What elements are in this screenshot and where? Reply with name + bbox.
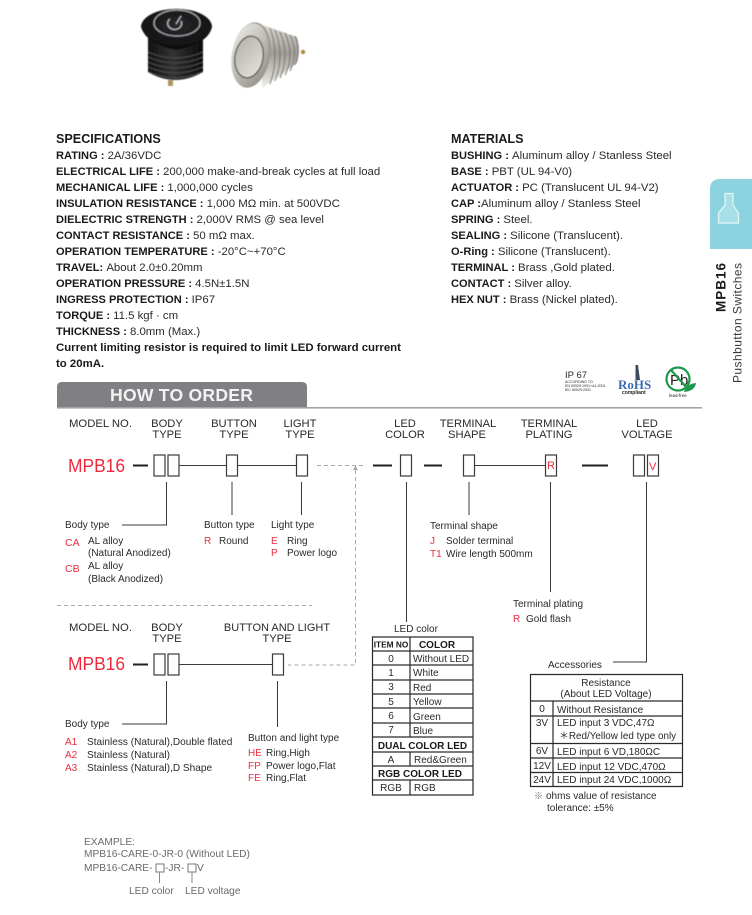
legend: body type alternate: A3: [65, 763, 78, 774]
leader lines: [122, 482, 646, 662]
photo: black power-logo switch: [141, 9, 212, 86]
text block: materials list: O-Ring : Silicone (Translucent).: [451, 246, 611, 258]
example block: LED color: [129, 886, 174, 897]
text block: materials list: ACTUATOR : PC (Translucent UL 94-V2): [451, 182, 659, 194]
column headings: LED: [394, 418, 416, 430]
footnote: ohms value of resistance: [546, 791, 657, 802]
table text: [374, 640, 469, 794]
legend: terminal shape: J: [430, 536, 435, 547]
table text: 6V: [536, 746, 548, 757]
table text: Green: [413, 712, 441, 723]
table grid: [530, 674, 682, 786]
text block: specification list: THICKNESS : 8.0mm (Max.): [56, 326, 200, 338]
text block: specification list: DIELECTRIC STRENGTH : 2,000V RMS @ sea level: [56, 214, 324, 226]
legend: button and light type: Power logo,Flat: [266, 761, 336, 772]
heading: materials: MATERIALS: [451, 132, 524, 146]
table text: Red: [413, 683, 431, 694]
text block: specification list: OPERATION TEMPERATURE : -20°C~+70°C: [56, 246, 286, 258]
table caption: LED color: [394, 624, 439, 635]
legend: terminal shape: Terminal shape: [430, 521, 498, 532]
column headings: COLOR: [385, 429, 425, 441]
heading: how to order: [57, 382, 702, 409]
legend: body type: [65, 520, 171, 585]
table text: White: [413, 668, 439, 679]
column headings: PLATING: [525, 429, 573, 441]
text block: specification list: INGRESS PROTECTION : IP67: [56, 294, 215, 306]
footnote: [534, 791, 657, 814]
example block: MPB16-CARE-0-JR-0 (Without LED): [84, 849, 250, 860]
legend: body type: CB: [65, 563, 80, 575]
table text: [533, 678, 676, 786]
legend: light type: Ring: [287, 536, 308, 547]
logo: IP 67: IEC 60529:2001: [565, 388, 591, 392]
column headings: TYPE: [152, 633, 182, 645]
table text: Blue: [413, 726, 433, 737]
text block: specification list: Current limiting resistor is required to limit LED forward current: [56, 342, 401, 354]
legend: button and light type: Ring,High: [266, 748, 310, 759]
photo: stainless steel switch: [227, 19, 305, 91]
legend: body type: AL alloy: [88, 561, 123, 572]
text block: specification list: RATING : 2A/36VDC: [56, 150, 161, 162]
column headings: TYPE: [262, 633, 292, 645]
legend: body type: AL alloy: [88, 536, 123, 547]
logo: RoHS compliant: [618, 365, 651, 396]
table text: ＊Red/Yellow led type only: [559, 731, 676, 742]
legend: body type alternate: A1: [65, 737, 78, 748]
legend: button and light type: FE: [248, 773, 261, 784]
column headings: MODEL NO.: [69, 622, 132, 634]
logo: IP 67: [565, 370, 605, 392]
text block: materials list: SPRING : Steel.: [451, 214, 533, 226]
column headings: TYPE: [152, 429, 182, 441]
panel: specifications: [56, 132, 401, 370]
text block: specification list: OPERATION PRESSURE : 4.5N±1.5N: [56, 278, 249, 290]
column headings: VOLTAGE: [621, 429, 673, 441]
table text: COLOR: [419, 640, 456, 651]
table text: 0: [539, 704, 545, 715]
legend: body type alternate: A2: [65, 750, 78, 761]
legend: body type: (Natural Anodized): [88, 548, 171, 559]
legend: button type: Round: [219, 536, 248, 547]
logo: lead-free: lead-free: [669, 393, 687, 398]
table text: LED input 24 VDC,1000Ω: [557, 775, 672, 786]
legend: button and light type: HE: [248, 748, 262, 759]
text block: specification list: [56, 150, 401, 370]
table text: Red&Green: [414, 755, 467, 766]
column headings: [69, 418, 673, 441]
table text: Without LED: [413, 654, 469, 665]
model code: MPB16: [68, 455, 125, 476]
example block: MPB16-CARE-: [84, 863, 152, 874]
column headings: BODY: [151, 418, 183, 430]
order code diagram: alternate model: [68, 622, 330, 727]
legend: terminal plating: R: [513, 614, 520, 625]
table text: Yellow: [413, 697, 442, 708]
logo: RoHS compliant: compliant: [622, 390, 646, 396]
text block: materials list: CAP :Aluminum alloy / Stanless Steel: [451, 198, 641, 210]
column headings: TYPE: [285, 429, 315, 441]
table text: Resistance: [581, 678, 631, 689]
table text: 6: [388, 711, 394, 722]
side label: MPB16 Pushbutton Switches: MPB16: [714, 263, 728, 312]
legend: body type alternate: Stainless (Natural),Double flated: [87, 737, 232, 748]
legend: terminal plating: Terminal plating: [513, 599, 583, 610]
column headings: MODEL NO.: [69, 418, 132, 430]
logo: lead-free: Pb: [670, 372, 688, 389]
table text: 24V: [533, 775, 551, 786]
legend: terminal shape: T1: [430, 549, 442, 560]
table: LED color: [372, 624, 473, 795]
code boxes and connectors: R: [547, 460, 555, 472]
column headings: LED: [636, 418, 658, 430]
legend: button and light type: [248, 733, 340, 784]
column headings: LIGHT: [284, 418, 317, 430]
column headings: BUTTON AND LIGHT: [224, 622, 330, 634]
table text: RGB: [380, 783, 402, 794]
table text: LED input 6 VD,180ΩC: [557, 747, 660, 758]
legend: light type: [271, 520, 337, 559]
legend: terminal plating: Gold flash: [526, 614, 571, 625]
text block: specification list: INSULATION RESISTANCE : 1,000 MΩ min. at 500VDC: [56, 198, 340, 210]
logo: IP 67: IP 67: [565, 370, 587, 381]
column headings: TERMINAL: [521, 418, 577, 430]
logo: IP 67: ACCORDING TO: [565, 380, 593, 384]
text block: materials list: TERMINAL : Brass ,Gold plated.: [451, 262, 615, 274]
legend: body type alternate: Stainless (Natural): [87, 750, 170, 761]
model code: MPB16: [68, 653, 125, 674]
table text: 5: [388, 697, 394, 708]
column headings: SHAPE: [448, 429, 486, 441]
text block: materials list: HEX NUT : Brass (Nickel plated).: [451, 294, 618, 306]
legend: light type: Light type: [271, 520, 315, 531]
side label: MPB16 Pushbutton Switches: Pushbutton Switches: [730, 263, 744, 383]
table text: A: [388, 755, 395, 766]
column headings: BODY: [151, 622, 183, 634]
text block: materials list: SEALING : Silicone (Translucent).: [451, 230, 623, 242]
table text: (About LED Voltage): [560, 689, 652, 700]
order code diagram: primary model: [68, 418, 673, 662]
table text: RGB COLOR LED: [378, 769, 462, 780]
example block: V: [197, 863, 204, 874]
legend: light type: P: [271, 548, 278, 559]
legend: light type: E: [271, 536, 278, 547]
table text: 3V: [536, 718, 548, 729]
table text: ITEM NO: [374, 640, 409, 650]
text block: specification list: TORQUE : 11.5 kgf · cm: [56, 310, 178, 322]
footnote: tolerance: ±5%: [547, 803, 614, 814]
table text: 12V: [533, 761, 551, 772]
logo: lead-free: [666, 368, 696, 398]
text block: specification list: to 20mA.: [56, 358, 104, 370]
legend: terminal shape: Wire length 500mm: [446, 549, 533, 560]
table: accessories resistance: [530, 660, 682, 814]
table text: LED input 12 VDC,470Ω: [557, 762, 666, 773]
text block: materials list: BASE : PBT (UL 94-V0): [451, 166, 572, 178]
code boxes and connectors: [133, 455, 658, 476]
icon: switch silhouette: [718, 194, 738, 223]
legend: button type: Button type: [204, 520, 255, 531]
table grid: [372, 637, 473, 795]
column headings: TERMINAL: [440, 418, 496, 430]
table text: RGB: [414, 783, 436, 794]
leader lines: [122, 681, 278, 727]
text block: materials list: CONTACT : Silver alloy.: [451, 278, 572, 290]
text block: specification list: TRAVEL: About 2.0±0.20mm: [56, 262, 202, 274]
table text: LED input 3 VDC,47Ω: [557, 718, 655, 729]
legend: light type: Power logo: [287, 548, 337, 559]
side tab: product category: [710, 179, 752, 249]
text block: specification list: ELECTRICAL LIFE : 200,000 make-and-break cycles at full load: [56, 166, 380, 178]
text block: materials list: BUSHING : Aluminum alloy / Stanless Steel: [451, 150, 672, 162]
connector: dashed link between models: [57, 466, 365, 665]
legend: button type: [204, 520, 255, 547]
table text: 1: [388, 668, 394, 679]
legend: terminal plating: [513, 599, 583, 625]
code boxes and connectors: [133, 654, 284, 675]
legend: body type: Body type: [65, 520, 110, 531]
text block: materials list: [451, 150, 672, 306]
table text: DUAL COLOR LED: [378, 741, 467, 752]
table text: 7: [388, 725, 394, 736]
legend: button type: R: [204, 536, 211, 547]
logo: IP 67: EN 60529:1991+A1:2001: [565, 384, 605, 388]
legend: body type: CA: [65, 537, 80, 549]
example block: [84, 837, 250, 897]
legend: body type: (Black Anodized): [88, 574, 163, 585]
text block: specification list: MECHANICAL LIFE : 1,000,000 cycles: [56, 182, 253, 194]
legend: body type alternate: Body type: [65, 719, 110, 730]
example block: -JR-: [165, 863, 184, 874]
column headings: BUTTON: [211, 418, 257, 430]
column headings: TYPE: [219, 429, 249, 441]
legend: terminal shape: Solder terminal: [446, 536, 513, 547]
code boxes and connectors: V: [649, 461, 657, 473]
side label: MPB16 Pushbutton Switches: [714, 263, 744, 383]
example block: EXAMPLE:: [84, 837, 135, 848]
legend: body type alternate: [65, 719, 232, 774]
table text: 0: [388, 654, 394, 665]
legend: button and light type: Button and light type: [248, 733, 340, 744]
table text: Without Resistance: [557, 705, 644, 716]
legend: button and light type: FP: [248, 761, 261, 772]
column headings: [69, 622, 330, 645]
text block: specification list: CONTACT RESISTANCE : 50 mΩ max.: [56, 230, 255, 242]
legend: terminal shape: [430, 521, 533, 560]
legend: button and light type: Ring,Flat: [266, 773, 306, 784]
heading: how to order: HOW TO ORDER: [110, 385, 253, 405]
logo: RoHS compliant: RoHS: [618, 377, 651, 392]
footnote: ※: [534, 791, 543, 801]
legend: body type alternate: Stainless (Natural),D Shape: [87, 763, 212, 774]
table caption: Accessories: [548, 660, 602, 671]
heading: specifications: SPECIFICATIONS: [56, 132, 161, 146]
table text: 3: [388, 682, 394, 693]
panel: materials: [451, 132, 672, 306]
example block: LED voltage: [185, 886, 241, 897]
